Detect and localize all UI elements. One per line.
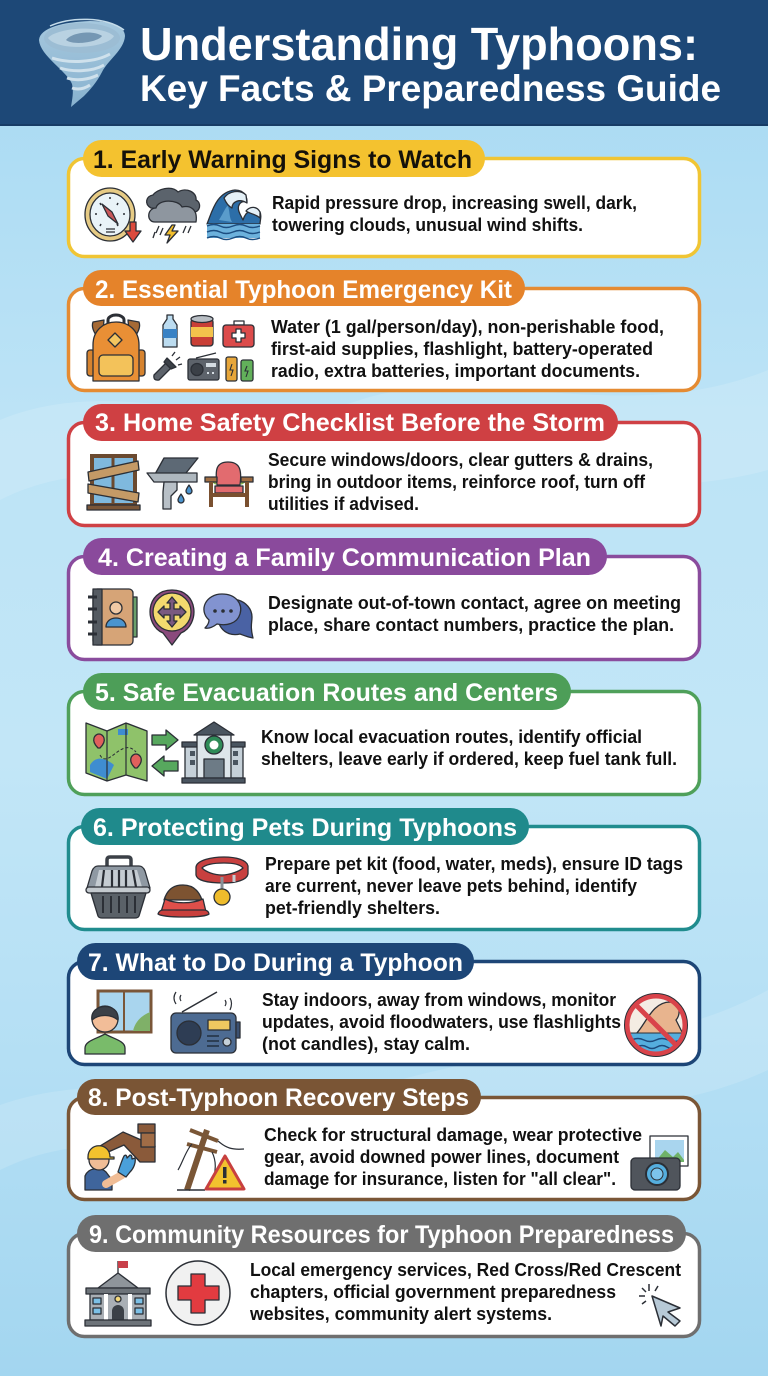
title: Key Facts & Preparedness Guide <box>140 68 721 109</box>
icon: flashlight <box>154 352 182 380</box>
text block <box>268 593 681 635</box>
text block: Rapid pressure drop, increasing swell, dark, <box>272 193 637 213</box>
text block: updates, avoid floodwaters, use flashlights <box>262 1012 621 1032</box>
panel: 9 community resources <box>68 1215 700 1336</box>
panel: 4 family communication <box>68 538 700 660</box>
icon: backpack <box>87 315 145 381</box>
icon: red cross <box>166 1261 230 1325</box>
icon: government building <box>85 1261 151 1326</box>
text block <box>264 1125 642 1189</box>
panel: 8 recovery steps <box>68 1079 700 1200</box>
icon: storm cloud <box>147 188 200 243</box>
icon: map pin with arrows <box>150 590 194 645</box>
icon: worker inspecting roof <box>85 1124 155 1190</box>
text block <box>262 990 621 1054</box>
text block: chapters, official government preparedness <box>250 1282 616 1302</box>
title <box>140 18 721 109</box>
icon: radio <box>171 992 240 1053</box>
icon: water bottle <box>163 315 177 347</box>
icon: map <box>86 723 147 781</box>
text block: pet-friendly shelters. <box>265 898 440 918</box>
text block: damage for insurance, listen for "all clear". <box>264 1169 616 1189</box>
heading: 4. Creating a Family Communication Plan <box>98 544 591 572</box>
panel: 3 home safety <box>68 404 700 526</box>
heading: 5. Safe Evacuation Routes and Centers <box>95 679 558 707</box>
panel: 2 emergency kit <box>68 270 700 390</box>
heading: 8. Post-Typhoon Recovery Steps <box>88 1084 469 1112</box>
icon: food can <box>191 316 213 346</box>
text block <box>272 193 637 235</box>
text block <box>261 727 677 769</box>
icon: outdoor chair <box>205 462 253 507</box>
icon: downed power pole <box>177 1130 244 1190</box>
text block: websites, community alert systems. <box>249 1304 552 1324</box>
icon: person at window <box>85 991 151 1054</box>
icon: boarded window <box>87 456 140 510</box>
text block <box>265 854 683 918</box>
text block: Prepare pet kit (food, water, meds), ensure ID tags <box>265 854 683 874</box>
text block: radio, extra batteries, important documents. <box>271 361 640 381</box>
heading: 1. Early Warning Signs to Watch <box>93 146 472 174</box>
text block: Check for structural damage, wear protective <box>264 1125 642 1145</box>
text block: Water (1 gal/person/day), non-perishable food, <box>271 317 664 337</box>
icon: barometer <box>85 188 141 242</box>
icon: camera and photos <box>631 1136 688 1190</box>
text block: place, share contact numbers, practice the plan. <box>268 615 674 635</box>
text block: shelters, leave early if ordered, keep fuel tank full. <box>261 749 677 769</box>
text block: (not candles), stay calm. <box>262 1034 470 1054</box>
text block: Stay indoors, away from windows, monitor <box>262 990 616 1010</box>
icon: food bowl <box>158 885 209 917</box>
heading: 3. Home Safety Checklist Before the Storm <box>95 409 605 437</box>
text block: Designate out-of-town contact, agree on meeting <box>268 593 681 613</box>
text block <box>271 317 664 381</box>
text block: gear, avoid downed power lines, document <box>264 1147 619 1167</box>
heading: 6. Protecting Pets During Typhoons <box>93 814 517 842</box>
icon: no floodwater sign <box>624 994 688 1056</box>
heading: 7. What to Do During a Typhoon <box>88 949 463 977</box>
text block: Local emergency services, Red Cross/Red Crescent <box>250 1260 681 1280</box>
icon: shelter building <box>182 722 245 783</box>
heading: 2. Essential Typhoon Emergency Kit <box>95 276 513 304</box>
text block: first-aid supplies, flashlight, battery-operated <box>271 339 653 359</box>
panel: 1 early warning signs <box>68 140 700 256</box>
text block: bring in outdoor items, reinforce roof, turn off <box>268 472 646 492</box>
icon: radio <box>188 353 219 380</box>
icon: pet carrier <box>86 857 150 918</box>
text block <box>249 1260 681 1324</box>
text block: towering clouds, unusual wind shifts. <box>272 215 583 235</box>
icon: chat bubbles <box>204 594 253 638</box>
text block <box>268 450 653 514</box>
icon: gutter <box>147 458 198 509</box>
text block: Secure windows/doors, clear gutters & drains, <box>268 450 653 470</box>
icon: cursor click <box>639 1284 680 1326</box>
icon: first aid kit <box>223 321 254 347</box>
icon: batteries <box>226 357 253 381</box>
text block: utilities if advised. <box>268 494 419 514</box>
icon: big wave <box>207 190 261 240</box>
icon: address book <box>88 589 137 645</box>
icon: tornado <box>39 19 125 107</box>
heading: 9. Community Resources for Typhoon Preparedness <box>89 1221 674 1249</box>
title: Understanding Typhoons: <box>140 18 698 70</box>
panel: 7 during a typhoon <box>68 943 700 1064</box>
icon: two-way arrows <box>152 730 178 776</box>
text block: are current, never leave pets behind, identify <box>265 876 637 896</box>
panel: 6 protecting pets <box>68 808 700 930</box>
icon: collar and tag <box>196 857 248 905</box>
text block: Know local evacuation routes, identify official <box>261 727 642 747</box>
header banner <box>0 0 768 126</box>
panel: 5 evacuation routes <box>68 673 700 794</box>
